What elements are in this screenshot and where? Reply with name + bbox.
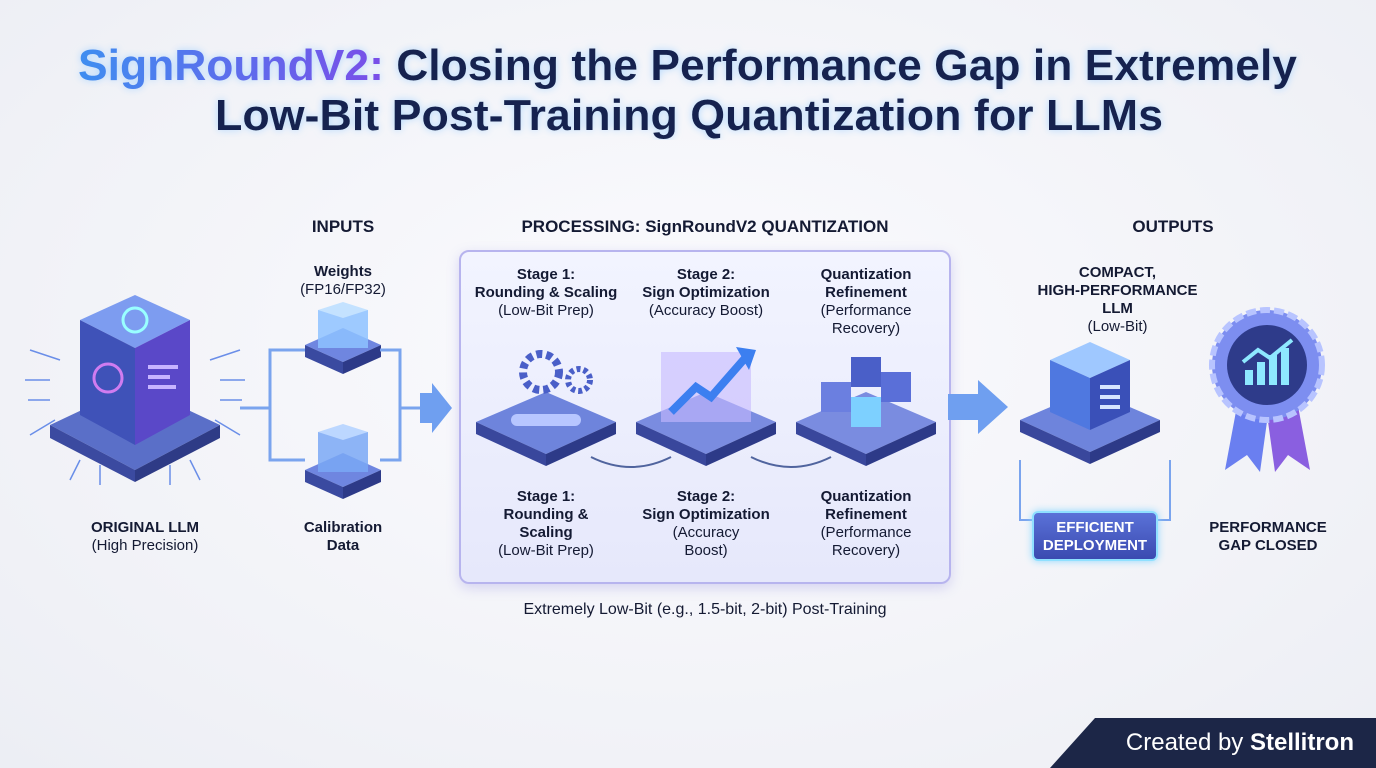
label: performance gap closed <box>1209 519 1327 554</box>
label: compact LLM <box>1038 264 1198 335</box>
heading: inputs: INPUTS <box>312 217 374 236</box>
label: performance gap closed: GAP CLOSED <box>1219 537 1317 554</box>
stage 1 top label: (Low-Bit Prep) <box>498 302 594 319</box>
refinement top label: (Performance <box>821 302 911 319</box>
refinement bottom label <box>821 488 911 559</box>
efficient deployment box <box>1032 511 1158 561</box>
stage 1 bottom label <box>498 488 594 559</box>
icon: compact LLM cube <box>1020 342 1160 464</box>
device icons row <box>476 347 936 468</box>
stage 1 top label: Stage 1: <box>517 266 575 283</box>
stage 2 bottom label: Boost) <box>684 542 728 559</box>
connector lines to deployment <box>1019 460 1171 521</box>
label: compact LLM: COMPACT, <box>1079 264 1156 281</box>
label: original LLM: ORIGINAL LLM <box>91 519 199 536</box>
refinement top label: Refinement <box>825 284 907 301</box>
label: calibration data <box>304 519 382 554</box>
label: calibration data: Data <box>327 537 359 554</box>
refinement top label: Recovery) <box>832 320 900 337</box>
stage 1 bottom label: Stage 1: <box>517 488 575 505</box>
icon: calibration data <box>305 424 381 499</box>
label: compact LLM: HIGH-PERFORMANCE <box>1038 282 1198 299</box>
title <box>77 41 1299 140</box>
stage 2 top label <box>642 266 770 319</box>
label: weights: Weights <box>314 263 372 280</box>
label: weights: (FP16/FP32) <box>300 281 386 298</box>
stage 2 bottom label: Sign Optimization <box>642 506 770 523</box>
stage 2 bottom label: Stage 2: <box>677 488 735 505</box>
refinement top label <box>821 266 911 337</box>
stage 1 bottom label: (Low-Bit Prep) <box>498 542 594 559</box>
refinement bottom label: (Performance <box>821 524 911 541</box>
stage 2 top label: Stage 2: <box>677 266 735 283</box>
icon: original LLM chip <box>25 295 245 485</box>
efficient deployment box: EFFICIENT <box>1056 519 1134 536</box>
label: compact LLM: LLM <box>1102 300 1133 317</box>
label: original LLM: (High Precision) <box>92 537 198 554</box>
footer: credit <box>1050 718 1376 768</box>
stage 2 bottom label <box>642 488 770 559</box>
stage 1 top label: Rounding & Scaling <box>475 284 617 301</box>
panel: processing <box>459 250 951 584</box>
connectors: chip to inputs <box>240 348 305 462</box>
label: original LLM <box>91 519 199 554</box>
icon: medal <box>1209 307 1325 472</box>
arrow: processing to outputs <box>948 380 1008 434</box>
heading: outputs: OUTPUTS <box>1132 217 1214 236</box>
title: Low-Bit Post-Training Quantization for LLMs <box>215 91 1163 140</box>
stage 2 top label: (Accuracy Boost) <box>649 302 763 319</box>
icon: weights <box>305 302 381 374</box>
refinement bottom label: Recovery) <box>832 542 900 559</box>
footer: credit: Created by Stellitron <box>1126 729 1354 756</box>
stage 1 bottom label: Rounding & <box>504 506 588 523</box>
arrow: inputs to processing <box>380 348 452 462</box>
heading: processing: PROCESSING: SignRoundV2 QUANTIZATION <box>521 217 889 236</box>
refinement bottom label: Refinement <box>825 506 907 523</box>
refinement top label: Quantization <box>821 266 911 283</box>
stage 1 top label <box>475 266 617 319</box>
label: calibration data: Calibration <box>304 519 382 536</box>
refinement bottom label: Quantization <box>821 488 911 505</box>
title: SignRoundV2: Closing the Performance Gap in Extremely <box>78 41 1298 90</box>
stage 2 bottom label: (Accuracy <box>673 524 739 541</box>
label: weights <box>300 263 386 298</box>
caption: Extremely Low-Bit (e.g., 1.5-bit, 2-bit) Post-Training <box>523 601 887 618</box>
efficient deployment box: DEPLOYMENT <box>1043 537 1147 554</box>
stage 2 top label: Sign Optimization <box>642 284 770 301</box>
stage 1 bottom label: Scaling <box>519 524 573 541</box>
label: performance gap closed: PERFORMANCE <box>1209 519 1327 536</box>
label: compact LLM: (Low-Bit) <box>1087 318 1148 335</box>
